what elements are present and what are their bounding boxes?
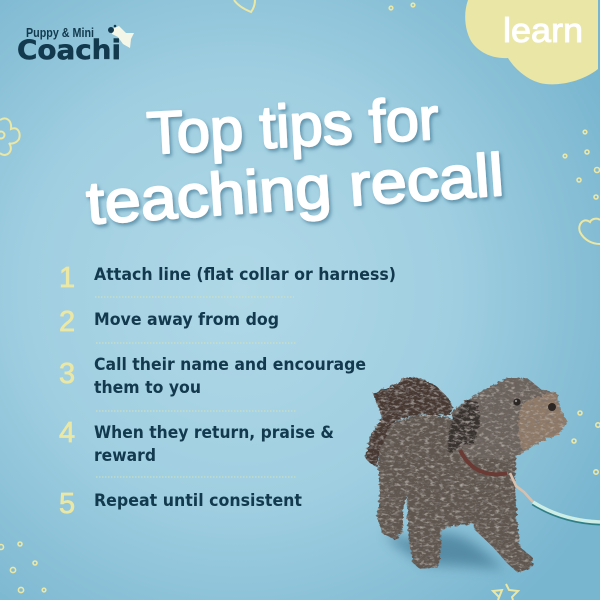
tip 4: 4: [59, 417, 75, 449]
heart top: [234, 0, 255, 12]
tip 1: Attach line (flat collar or harness): [94, 265, 396, 285]
tail: [365, 377, 453, 467]
nose and eye: [513, 398, 556, 411]
dog shadow: [385, 532, 505, 570]
star bottom: [493, 584, 518, 600]
icon: logo dog: [108, 25, 134, 48]
tip 1: 1: [59, 262, 75, 294]
tip 3: them to you: [94, 378, 201, 398]
tip 3: [59, 355, 366, 398]
ear: [448, 400, 480, 453]
tip 4: When they return, praise &: [94, 423, 334, 443]
tip 3: 3: [59, 358, 75, 390]
learn badge: [465, 0, 598, 84]
badge shape: [465, 0, 598, 84]
flower doodle: [0, 118, 20, 155]
tip 3: Call their name and encourage: [94, 355, 366, 375]
title: Top tips for: [145, 85, 440, 167]
tip 4: [59, 417, 334, 466]
dog photo: [365, 377, 600, 572]
tip 5: 5: [59, 488, 75, 520]
heart right: [579, 219, 600, 244]
tip 4: reward: [94, 446, 156, 466]
tip 2: 2: [59, 306, 75, 338]
tip 2: [59, 306, 279, 338]
tip 1: [59, 262, 396, 294]
leash: [533, 502, 600, 523]
badge label: learn: [503, 12, 583, 50]
tip 2: Move away from dog: [94, 310, 279, 330]
collar: [460, 450, 507, 474]
tip 5: [59, 488, 302, 520]
logo: [17, 25, 134, 66]
tip 5: Repeat until consistent: [94, 491, 302, 511]
list: tips: [59, 262, 396, 520]
muzzle: [518, 393, 567, 451]
logo: Coachi: [17, 35, 121, 66]
title: [84, 85, 506, 237]
head: [448, 378, 567, 458]
body and legs: [377, 415, 533, 572]
title: teaching recall: [84, 141, 506, 237]
logo: Puppy & Mini: [26, 25, 94, 40]
clip: [510, 473, 533, 502]
